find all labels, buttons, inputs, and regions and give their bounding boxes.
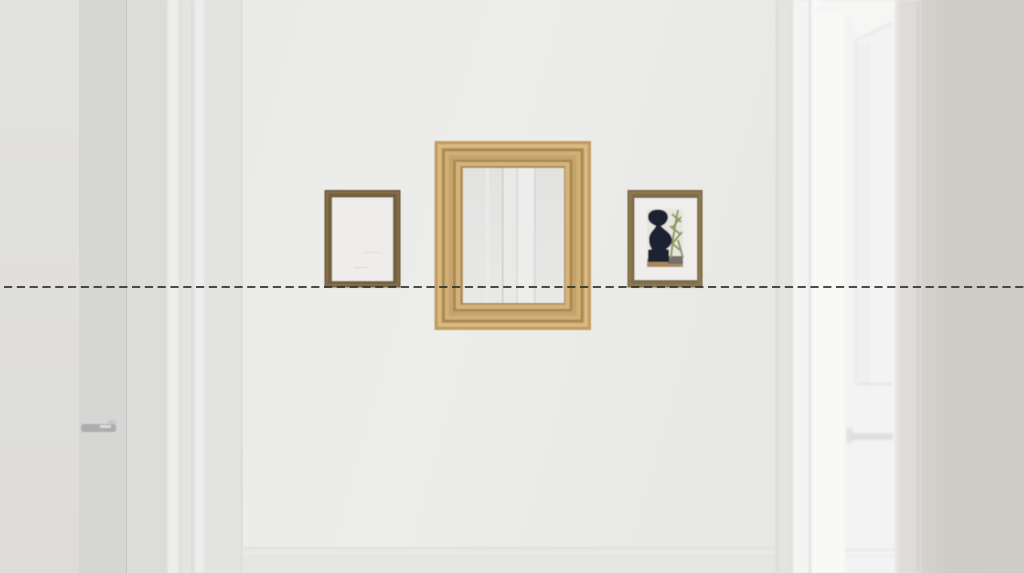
artwork: dark vase and bamboo xyxy=(647,209,683,267)
right doorway and open door xyxy=(776,0,921,573)
frame: right small bronze frame with artwork xyxy=(628,190,702,288)
frame: left small bronze frame xyxy=(324,190,400,288)
icon: open door handle xyxy=(846,428,893,443)
door panel moulding xyxy=(845,23,895,556)
back wall xyxy=(243,0,777,573)
dashed alignment line xyxy=(4,286,1024,288)
vase silhouette xyxy=(648,210,672,262)
left door trim xyxy=(167,0,243,573)
frame: large gold mirror xyxy=(434,141,591,330)
blank artwork xyxy=(332,198,393,281)
baseboard xyxy=(243,547,777,573)
icon: door handle xyxy=(81,420,116,432)
left door section xyxy=(0,0,168,573)
mirror glass reflection xyxy=(463,168,564,303)
right side wall xyxy=(921,0,1024,573)
